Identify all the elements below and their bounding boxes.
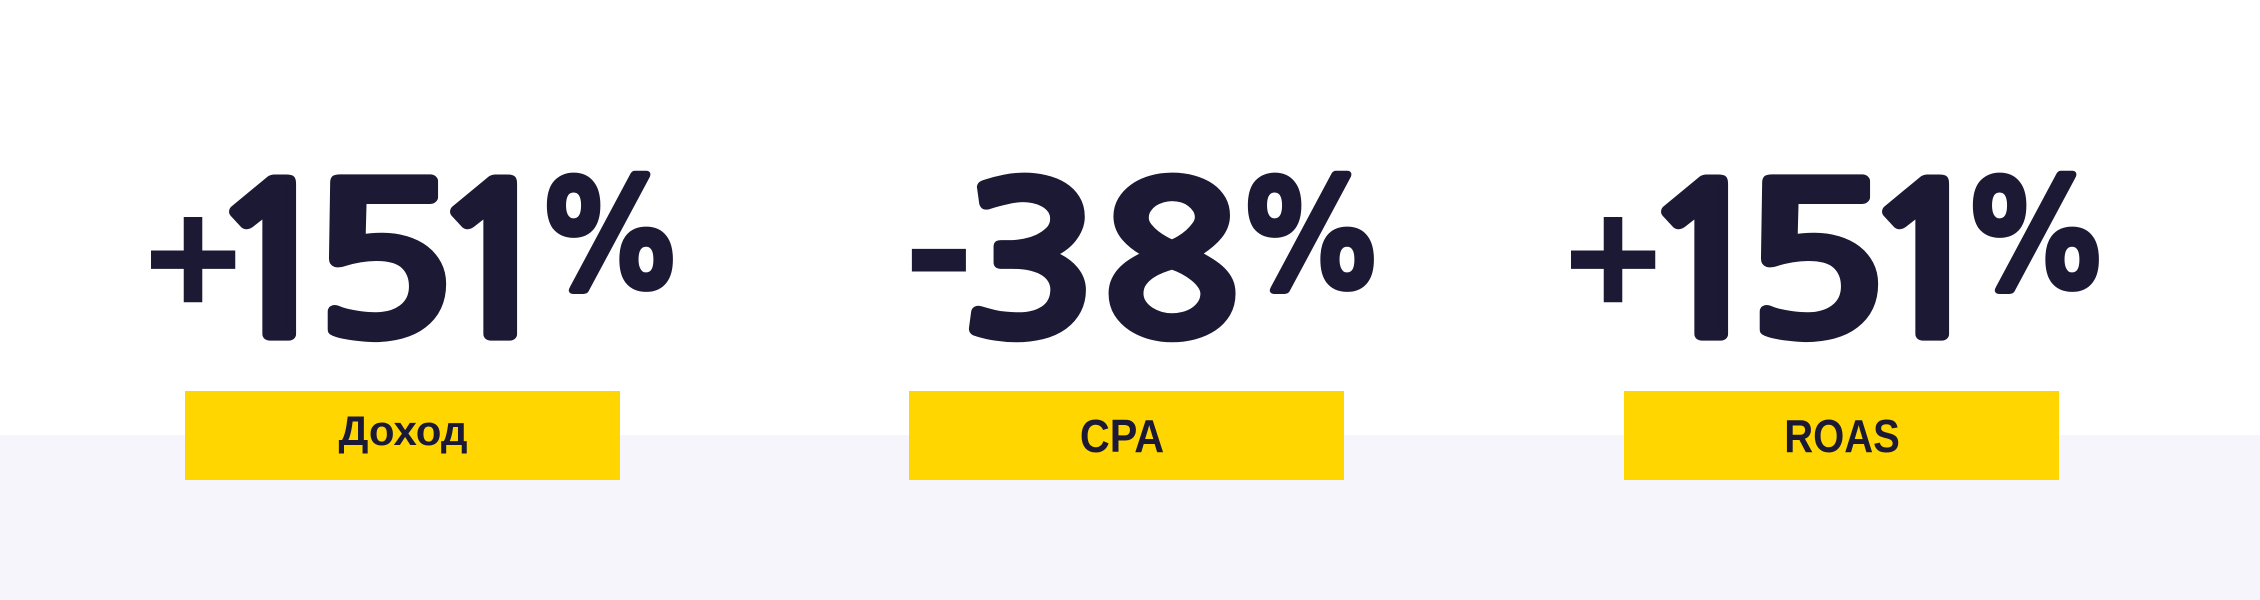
metric: revenue: [144, 161, 687, 480]
label: CPA: CPA: [1080, 411, 1164, 463]
value: +151%: 1: [204, 161, 344, 367]
value: +151%: %: [1959, 166, 2113, 311]
value: +151%: [1564, 161, 2113, 367]
label: ROAS: [1624, 391, 2059, 480]
value: +151%: 1: [425, 161, 565, 367]
value: +151%: +: [1564, 164, 1662, 352]
value: -38%: [904, 137, 1388, 367]
label: ROAS: ROAS: [1784, 411, 1900, 463]
value: +151%: [144, 161, 687, 367]
value: +151%: 1: [1857, 161, 1997, 367]
label: Доход: Доход: [338, 407, 468, 454]
value: +151%: 5: [1741, 161, 1889, 367]
value: +151%: 1: [1636, 161, 1776, 367]
value: +151%: 5: [309, 161, 457, 367]
value: -38%: -: [904, 137, 974, 350]
value: +151%: %: [533, 166, 687, 311]
label: CPA: [909, 391, 1344, 480]
value: -38%: %: [1234, 166, 1388, 311]
value: -38%: 8: [1101, 161, 1241, 367]
value: +151%: +: [144, 164, 242, 352]
label: Доход: [185, 391, 620, 480]
metric: ROAS: [1564, 161, 2113, 480]
metric: CPA: [904, 137, 1388, 480]
value: -38%: 3: [960, 161, 1100, 367]
